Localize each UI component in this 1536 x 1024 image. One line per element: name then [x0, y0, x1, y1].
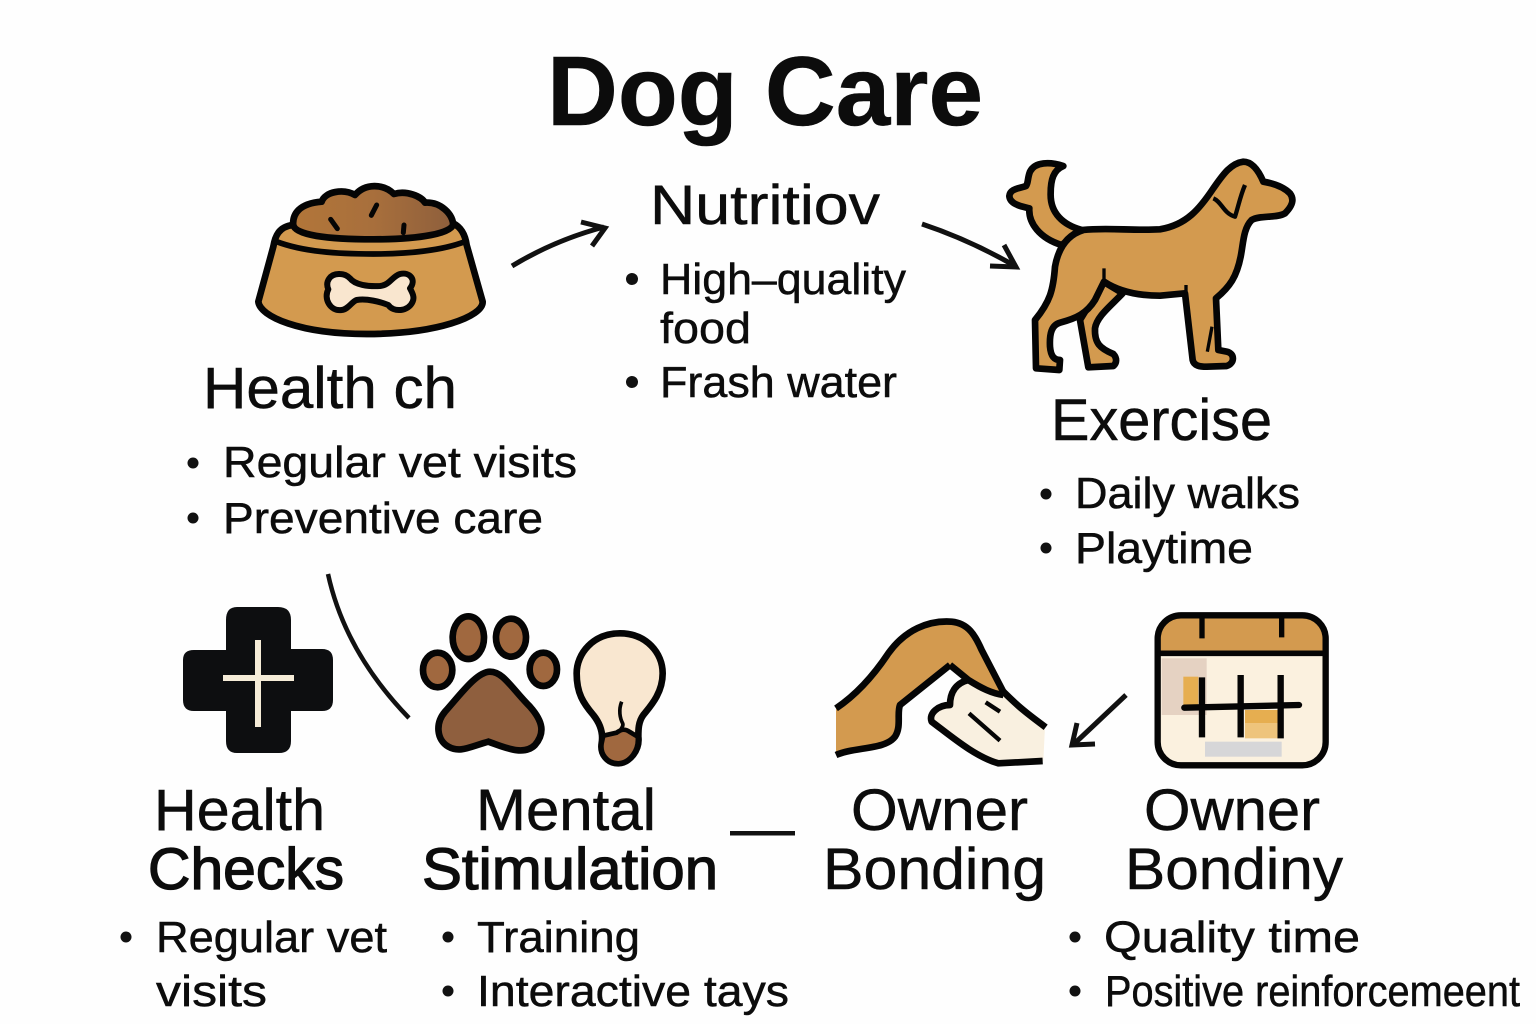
icon: hand petting dog — [836, 621, 1046, 763]
arrow: bowl to nutrition — [512, 222, 605, 266]
heading: Owner Bondiny: Bondiny — [1125, 837, 1343, 902]
dog ear — [1213, 185, 1245, 217]
heading: Health ch: Health ch — [203, 356, 457, 421]
heading: Exercise: Exercise — [1051, 388, 1272, 453]
arrow: nutrition to dog — [922, 224, 1016, 267]
icon: medical cross — [183, 607, 333, 753]
heading: Mental Stimulation: Stimulation — [422, 837, 718, 902]
list: nutrition: Frash water — [660, 358, 897, 407]
dog leg — [836, 621, 1005, 755]
icon: dog — [1009, 162, 1292, 370]
list: health checks: visits — [156, 967, 267, 1016]
dog body — [1035, 162, 1292, 370]
icon: bone — [327, 274, 413, 310]
list: health checks — [120, 913, 387, 1016]
arrow: calendar to hand — [1072, 695, 1126, 745]
connector dash — [730, 831, 795, 836]
list: nutrition: food — [660, 304, 751, 353]
list: health: Regular vet visits — [223, 438, 577, 487]
heading: Mental Stimulation — [422, 778, 718, 902]
list: nutrition — [626, 255, 906, 407]
heading: Mental Stimulation: Mental — [476, 778, 656, 843]
list: health: Preventive care — [223, 494, 543, 543]
dog tail — [1009, 163, 1082, 245]
list: exercise: Playtime — [1075, 524, 1253, 573]
list: exercise: Daily walks — [1075, 469, 1300, 518]
list: health — [188, 438, 577, 543]
icon: calendar — [1158, 615, 1326, 765]
heading: Health Checks: Health — [154, 778, 325, 843]
icon: dog food bowl — [258, 186, 483, 334]
list: owner bonding — [1070, 913, 1520, 1016]
list: mental stimulation: Training — [477, 913, 640, 962]
dog rear leg — [1080, 282, 1123, 367]
list: nutrition: High–quality — [660, 255, 906, 304]
dog leg shading — [1104, 268, 1212, 352]
icon: paw print — [423, 616, 557, 750]
heading: Owner Bonding: Owner — [851, 778, 1028, 843]
human hand — [931, 680, 1045, 763]
heading: Nutritiov: Nutritiov — [650, 173, 880, 236]
arrow: curved connector — [328, 574, 409, 718]
title: Dog Care — [547, 36, 983, 146]
heading: Owner Bonding: Bonding — [823, 837, 1046, 902]
list: mental stimulation — [442, 913, 789, 1016]
heading: Owner Bondiny — [1125, 778, 1343, 902]
list: health checks: Regular vet — [156, 913, 387, 962]
icon: light bulb — [577, 633, 663, 763]
heading: Owner Bondiny: Owner — [1144, 778, 1320, 843]
list: exercise — [1040, 469, 1300, 573]
heading: Health Checks — [148, 778, 344, 902]
list: owner bonding: Quality time — [1104, 913, 1360, 962]
heading: Owner Bonding — [823, 778, 1046, 902]
list: mental stimulation: Interactive tays — [477, 967, 789, 1016]
heading: Health Checks: Checks — [148, 837, 344, 902]
